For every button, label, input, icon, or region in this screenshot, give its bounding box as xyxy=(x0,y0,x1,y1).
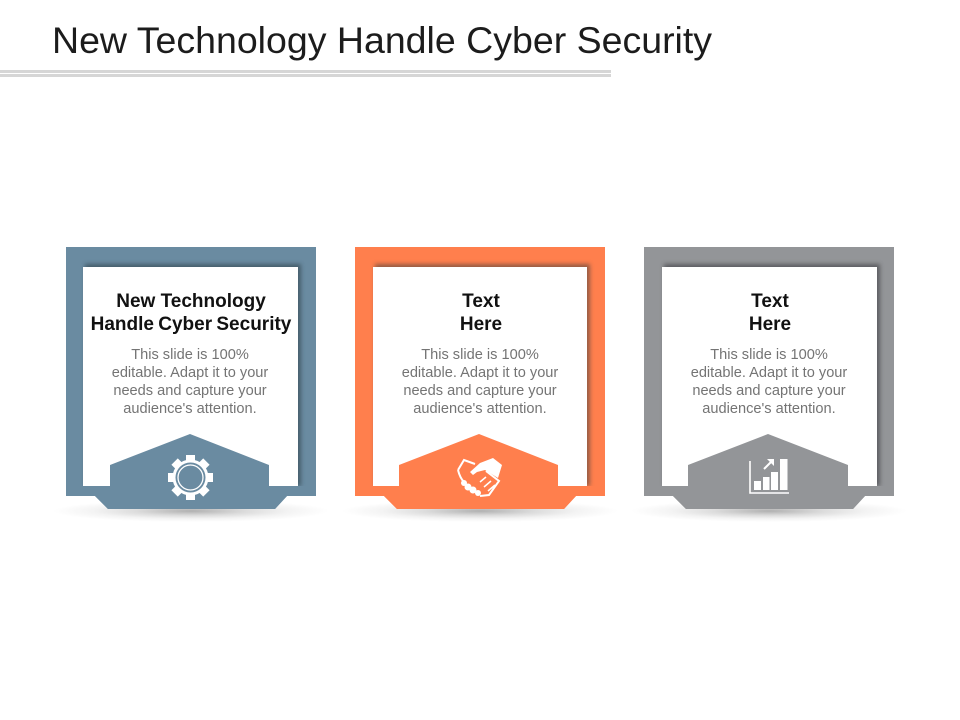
panel body text: audience's attention. xyxy=(413,401,547,417)
inner shadow xyxy=(664,264,880,486)
title: New Technology Handle Cyber Security xyxy=(52,19,712,61)
panel body text xyxy=(402,347,558,417)
base tab xyxy=(66,434,316,509)
panel: new technology xyxy=(66,247,316,520)
panel body text: editable. Adapt it to your xyxy=(691,365,847,381)
title rule xyxy=(0,70,611,77)
card frame xyxy=(66,247,316,509)
panel heading xyxy=(91,291,292,335)
floor shadow xyxy=(342,500,618,522)
card frame xyxy=(644,247,894,509)
card frame xyxy=(355,247,605,509)
panel heading: Text xyxy=(751,291,789,312)
inner shadow xyxy=(375,264,590,486)
panel body text: needs and capture your xyxy=(692,383,846,399)
panel heading: Handle Cyber Security xyxy=(91,314,292,335)
floor shadow xyxy=(53,500,329,522)
panel: text here orange xyxy=(355,247,605,520)
panel heading: Here xyxy=(749,314,791,335)
panel heading: Text xyxy=(462,291,500,312)
white inner panel xyxy=(83,267,298,486)
panel body text: This slide is 100% xyxy=(421,347,539,363)
panel body text: audience's attention. xyxy=(123,401,257,417)
floor shadow xyxy=(631,500,907,522)
panel body text xyxy=(112,347,268,417)
white inner panel xyxy=(373,267,587,486)
panel heading xyxy=(460,291,502,335)
panel body text: needs and capture your xyxy=(113,383,267,399)
icon: gear xyxy=(168,455,213,500)
inner shadow xyxy=(85,264,301,486)
white inner panel xyxy=(662,267,877,486)
panel body text: editable. Adapt it to your xyxy=(112,365,268,381)
panel heading: New Technology xyxy=(116,291,266,312)
panel body text: This slide is 100% xyxy=(131,347,249,363)
panel body text: audience's attention. xyxy=(702,401,836,417)
base tab xyxy=(644,434,894,509)
panel body text xyxy=(691,347,847,417)
panel body text: needs and capture your xyxy=(403,383,557,399)
icon: bar chart with arrow xyxy=(750,459,789,493)
panel heading: Here xyxy=(460,314,502,335)
panel: text here grey xyxy=(644,247,894,520)
icon: handshake xyxy=(458,458,502,496)
panel body text: editable. Adapt it to your xyxy=(402,365,558,381)
panel body text: This slide is 100% xyxy=(710,347,828,363)
panel heading xyxy=(749,291,791,335)
base tab xyxy=(355,434,605,509)
